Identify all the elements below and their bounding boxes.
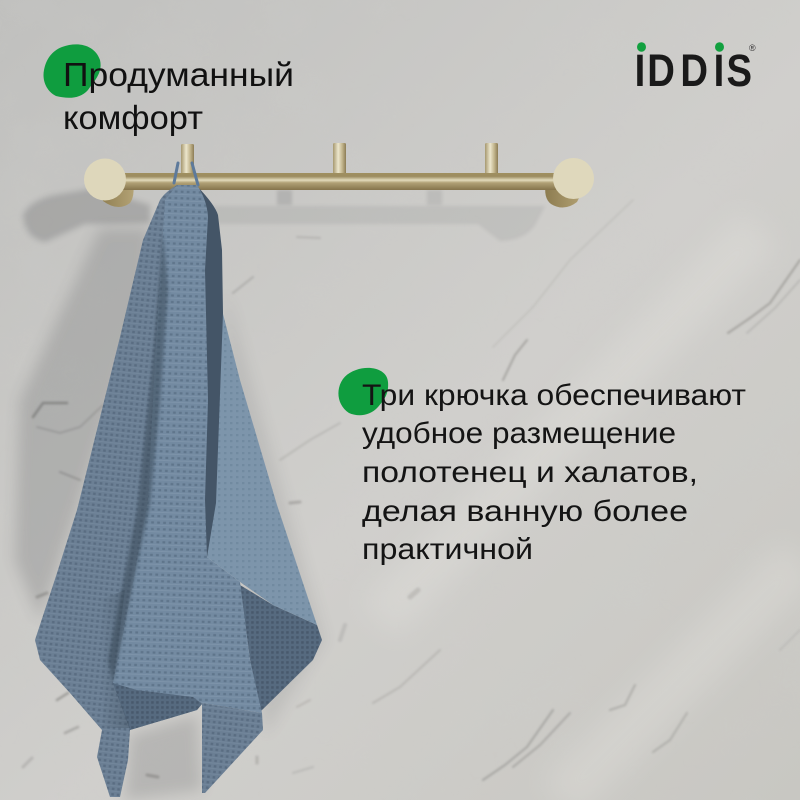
description text: практичной	[362, 533, 533, 566]
left wall mount	[99, 182, 134, 207]
dark inner fold band	[196, 186, 223, 557]
rail bar	[122, 173, 562, 190]
description group	[338, 368, 754, 566]
lower front piece	[202, 703, 263, 793]
description text: Три крючка обеспечивают	[362, 379, 746, 412]
logo: IDDIS: IDDIS	[635, 45, 752, 96]
icon: hook 2	[333, 143, 346, 175]
right round cap	[553, 158, 594, 199]
icon: hook 3	[485, 143, 498, 175]
left panel	[35, 185, 202, 797]
right flap	[205, 270, 317, 625]
registered mark: ®	[749, 43, 756, 53]
icon: hook 1	[181, 144, 194, 176]
heading text: комфорт	[63, 99, 203, 136]
central panel	[113, 185, 262, 713]
description text: полотенец и халатов,	[362, 456, 698, 489]
right wall mount	[545, 182, 583, 208]
left fold shadow	[108, 230, 168, 683]
heading text: Продуманный	[63, 56, 294, 93]
left round cap	[84, 158, 126, 200]
logo dots	[637, 42, 724, 52]
description text: удобное размещение	[362, 417, 676, 450]
shadows on wall	[15, 188, 545, 800]
back dark layer	[240, 585, 322, 712]
towel rail with three hooks	[84, 143, 594, 208]
towel	[35, 163, 322, 797]
green blob: description	[338, 368, 388, 415]
towel loop	[174, 163, 198, 185]
green blob: heading	[44, 44, 101, 98]
lower inner fold	[113, 683, 202, 730]
heading group	[44, 44, 303, 136]
description text: делая ванную более	[362, 495, 688, 528]
lower left shade	[100, 590, 130, 728]
